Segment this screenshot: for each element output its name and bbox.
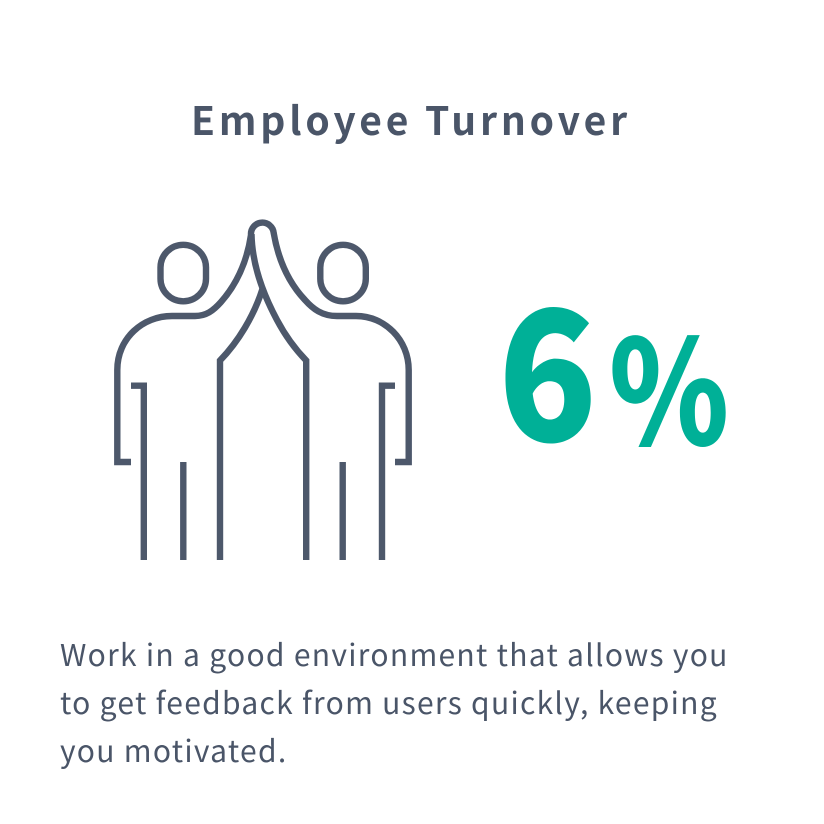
statistic: 6%: 6 — [498, 232, 597, 494]
statistic: 6%: % — [609, 277, 729, 487]
description text: Work in a good environment that allows you — [60, 631, 729, 675]
description text: to get feedback from users quickly, keeping — [60, 679, 718, 723]
title: Employee Turnover — [191, 91, 631, 147]
description text: you motivated. — [60, 727, 287, 771]
statistic: 6% — [498, 232, 729, 494]
description text — [60, 631, 729, 771]
